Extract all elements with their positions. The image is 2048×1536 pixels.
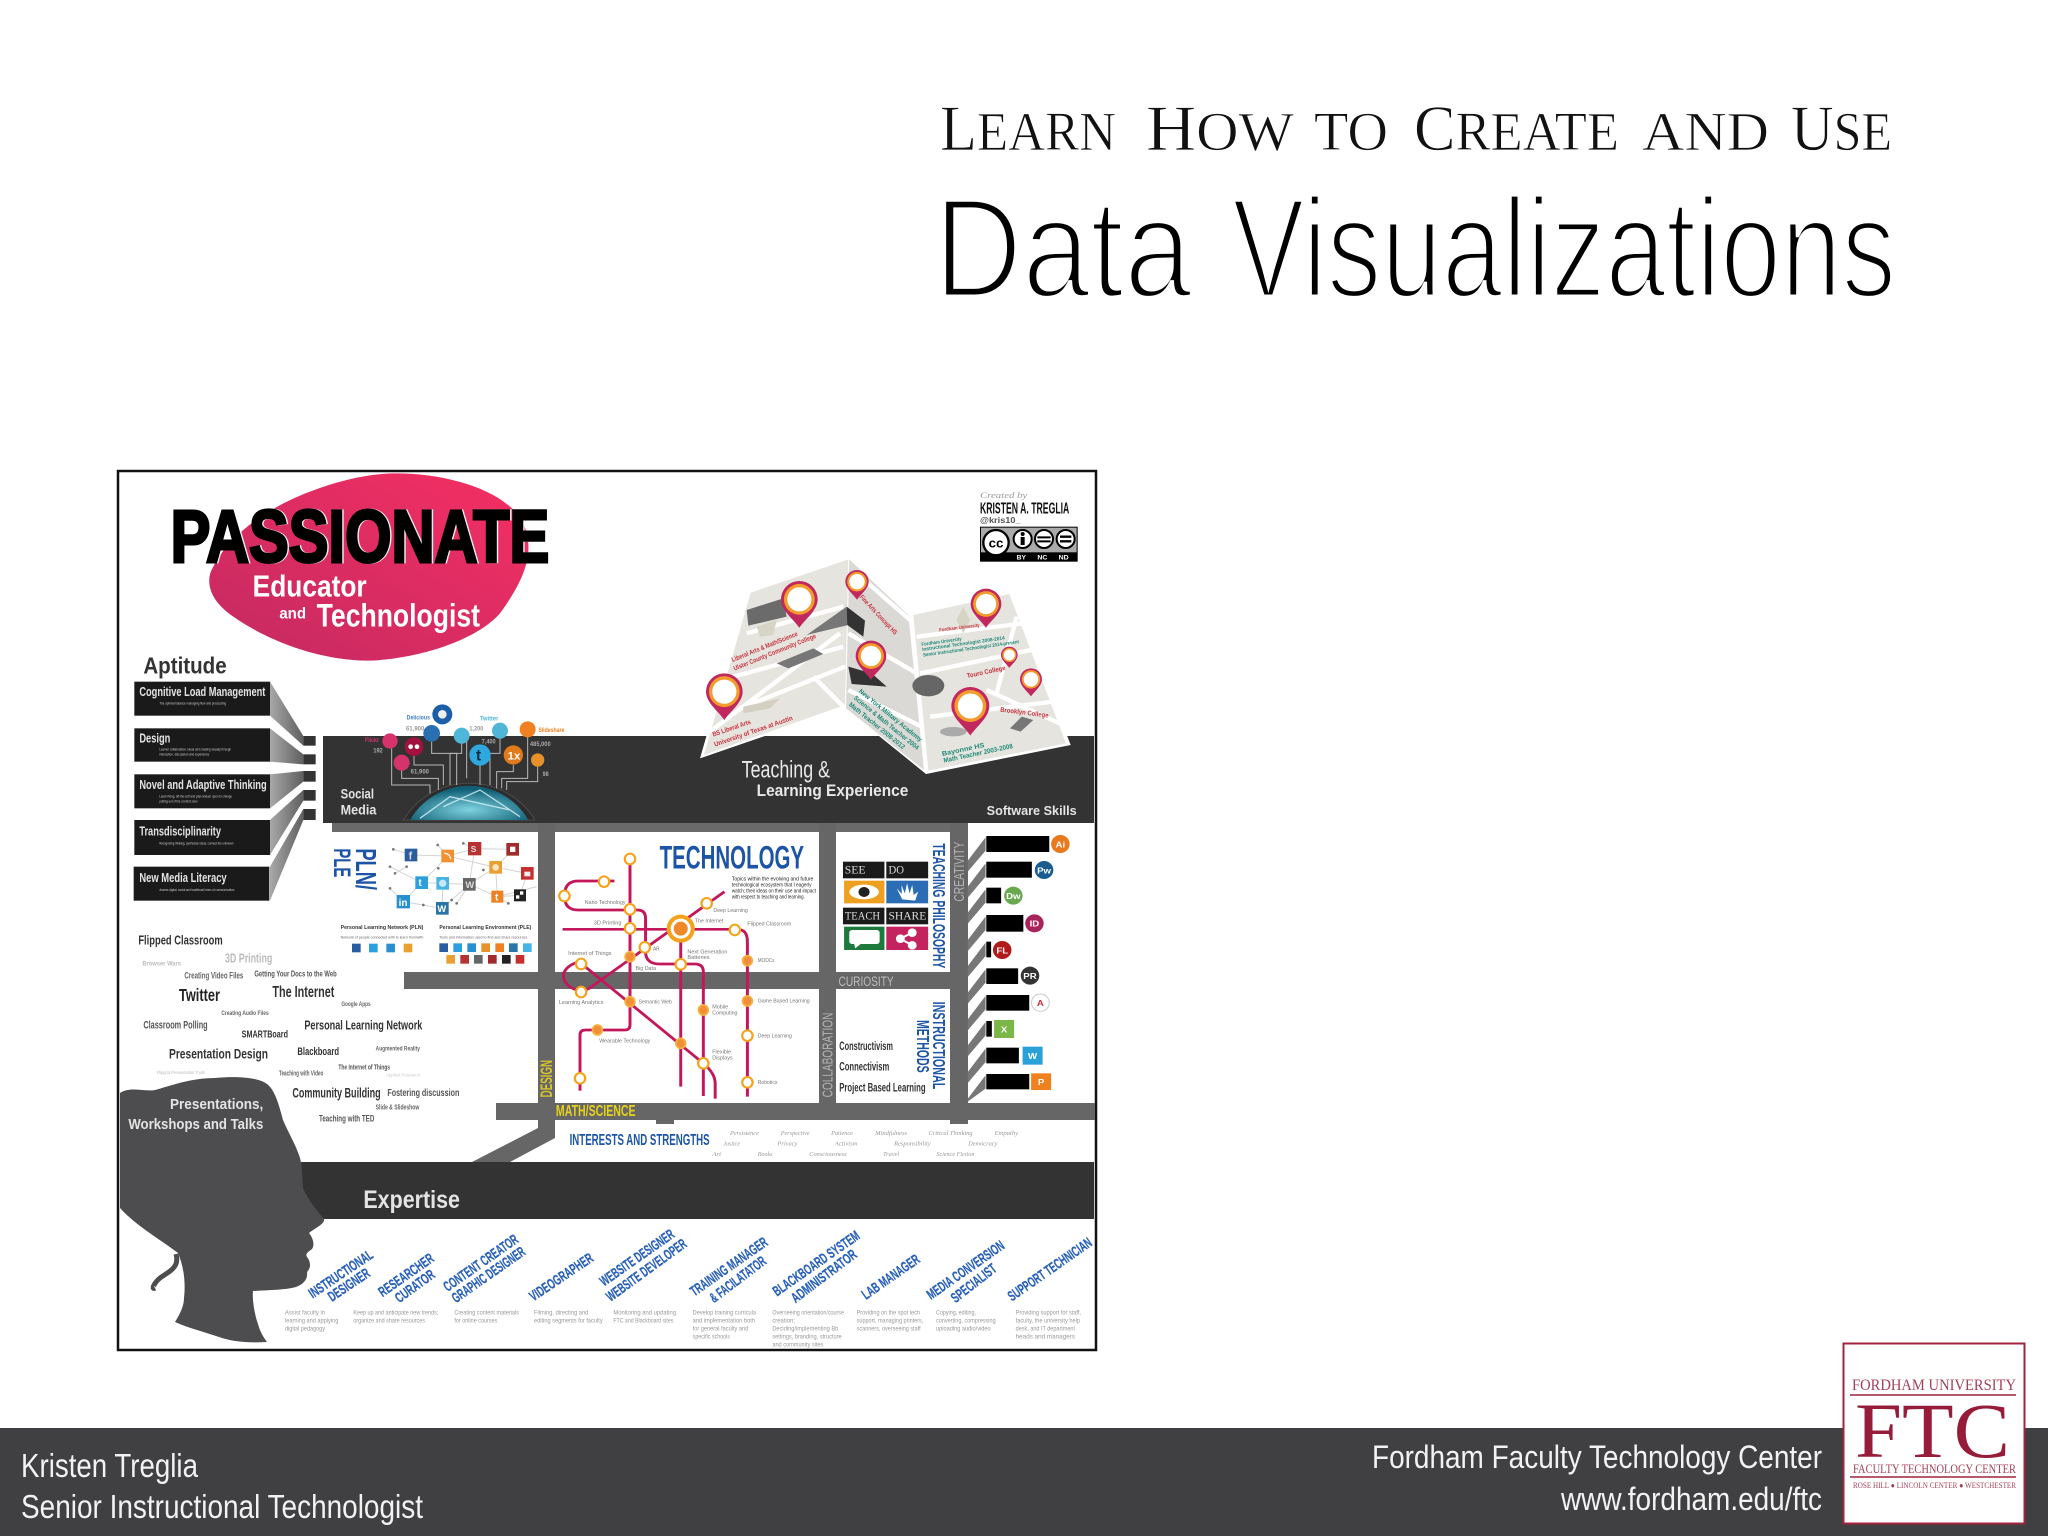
role descriptions, left: Filming, directing and [534, 1309, 589, 1316]
word cloud: Applied Research [386, 1073, 420, 1078]
data lines [392, 737, 538, 793]
bar connectors [968, 837, 986, 1102]
credit: created by [980, 491, 1069, 525]
road labels: MATH/SCIENCE [556, 1103, 636, 1120]
footer: organization [1372, 1439, 1822, 1517]
role descriptions, right: desk, and IT department [1016, 1326, 1075, 1333]
logo: FTC [1844, 1344, 2024, 1524]
subheading: educator and technologist [253, 570, 480, 634]
interests words: Empathy [993, 1130, 1018, 1137]
methods list: Project Based Learning [839, 1081, 926, 1095]
expertise roles, right [597, 1227, 1095, 1349]
map labels: Math Teacher 2008-2012 [847, 701, 906, 751]
word cloud: 3D Printing [225, 951, 272, 965]
methods list [839, 1040, 926, 1095]
filled stations [593, 952, 752, 1048]
panel: technology metro map [559, 840, 816, 1099]
station labels: Big Data [636, 966, 656, 972]
word cloud: The Internet of Things [338, 1065, 390, 1072]
software icons: ID [1030, 919, 1040, 929]
social labels: 485,000 [530, 741, 551, 748]
panel: teaching philosophy [843, 843, 949, 968]
heading: software skills: Software Skills [987, 803, 1077, 818]
methods list: Connectivism [839, 1060, 889, 1074]
interests words: Consciousness [809, 1151, 847, 1158]
social labels: 1,200 [469, 725, 484, 732]
role descriptions, right: FTC and Blackboard sites [613, 1318, 673, 1325]
heading: instructional methods: INSTRUCTIONAL [929, 1002, 949, 1089]
word cloud: Presentation Design [169, 1045, 268, 1061]
heading: PLN/PLE [328, 848, 381, 890]
interests words: Patience [830, 1130, 853, 1137]
word cloud: Augmented Reality [376, 1046, 420, 1053]
expertise roles, right: SPECIALIST [948, 1261, 1000, 1306]
heading: interests and strengths: INTERESTS AND STRENGTHS [570, 1131, 710, 1149]
network icons: t [418, 878, 422, 889]
aptitude box: transdisciplinarity: Transdisciplinarity [139, 824, 221, 838]
station labels: Game Based Learning [758, 999, 810, 1005]
word cloud: Slide & Slideshow [376, 1104, 420, 1111]
panel: embedded infographic [118, 471, 1096, 1350]
role descriptions, right: scanners, overseeing staff [857, 1326, 921, 1333]
logo: FTC: FORDHAM UNIVERSITY [1852, 1377, 2016, 1394]
network icons: W [465, 880, 474, 890]
role descriptions, left: learning and applying [285, 1318, 339, 1325]
social labels: Twitter [480, 716, 499, 723]
social icons: 1x [508, 750, 521, 762]
interests words: Persistence [729, 1130, 759, 1137]
title: data visualizations: Data [934, 169, 1192, 328]
credit: created by: @kris10_ [980, 515, 1021, 525]
metro hub [667, 915, 695, 943]
map labels: Ulster County Community College [733, 633, 818, 673]
word cloud: Personal Learning Network [304, 1017, 423, 1032]
social labels: 98 [543, 771, 549, 778]
heading: PLN/PLE: PLN/ [349, 848, 381, 890]
software icons: W [1028, 1051, 1038, 1061]
interests words: Privacy [776, 1141, 797, 1148]
role descriptions, right: creation; [772, 1318, 795, 1325]
tile: see: SEE [845, 863, 866, 876]
title: learn how to create and use: to [1314, 80, 1388, 167]
road network [404, 823, 1095, 1162]
role descriptions, right: for general faculty and [693, 1326, 749, 1333]
role descriptions, right: Providing on the spot tech [857, 1309, 920, 1316]
network icons: in [399, 898, 408, 909]
panel: software skills bars [968, 835, 1070, 1102]
role descriptions, left: digital pedagogy [285, 1326, 326, 1333]
logo: FTC: FTC [1855, 1387, 2010, 1474]
folded map [700, 556, 1071, 774]
station labels: Deep Learning [758, 1034, 792, 1039]
aptitude box: novel and adaptive thinking: Novel and Adaptive Thinking [139, 778, 267, 792]
social labels: Slideshare [538, 727, 565, 734]
word cloud: Flipped Classroom [138, 933, 223, 947]
metro lines [563, 858, 747, 1099]
map labels: Science & Math Teacher 2004 [852, 695, 920, 752]
aptitude box: cognitive load management: Cognitive Load Management [139, 685, 266, 699]
map labels [712, 594, 1049, 765]
title: learn how to create and use: Learn [940, 80, 1116, 167]
station labels: Robotics [758, 1080, 778, 1086]
ring stations [559, 854, 753, 1088]
network icons: t [495, 893, 499, 904]
social labels: 61,900 [406, 726, 425, 733]
word cloud: Creating Video Files [184, 971, 243, 981]
aptitude box: new media literacy: Assess digital, social and traditional forms of communication [159, 888, 234, 892]
heading: technology: TECHNOLOGY [660, 840, 804, 876]
word cloud: Twitter [179, 985, 220, 1005]
technology intro text [732, 877, 816, 901]
subheading: educator and technologist: Technologist [317, 598, 480, 634]
expertise roles, right: TRAINING MANAGER [687, 1234, 771, 1300]
map labels: Bayonne HS [941, 742, 986, 758]
captions: PLN and PLE: Personal Learning Environment (PLE) [439, 925, 531, 931]
network icons: S [471, 844, 477, 854]
map labels: Fordham University [921, 636, 962, 648]
role descriptions, right: converting, compressing [936, 1318, 996, 1325]
technology intro text: Topics within the evolving and future [732, 877, 813, 883]
map labels: Fordham University [939, 623, 980, 634]
station labels: 3D Printing [594, 921, 622, 926]
word cloud: Classroom Polling [143, 1019, 208, 1031]
map labels: Instructional Technologist 2008-2014 [922, 635, 1005, 653]
aptitude box: novel and adaptive thinking: Learn fixing, off-the-cuff and plan ahead; open to change [159, 795, 232, 799]
panel: PLN and PLE network [328, 842, 537, 964]
role descriptions, right: faculty, the university help [1016, 1318, 1080, 1325]
software icons: Ai [1056, 840, 1065, 849]
expertise roles, left: CONTENT CREATOR [441, 1232, 522, 1295]
heading: expertise: Expertise [363, 1187, 460, 1214]
software icons: Pw [1037, 866, 1052, 875]
station labels: Mobile [712, 1005, 728, 1010]
interests words: Science Fiction [936, 1151, 975, 1158]
word cloud: Creating Audio Files [221, 1010, 269, 1017]
footer: organization: www.fordham.edu/ftc [1560, 1481, 1822, 1517]
interests words: Books [758, 1151, 773, 1158]
software icons: A [1037, 998, 1044, 1008]
station labels: Deep Learning [713, 908, 748, 914]
heading: PLN/PLE: PLE [328, 848, 355, 877]
network icons: W [437, 904, 446, 914]
software icons: PR [1023, 971, 1037, 981]
panel: aptitude [134, 652, 316, 901]
road labels: CURIOSITY [839, 975, 894, 990]
label: social media: Media [341, 802, 377, 818]
software icons: P [1038, 1077, 1044, 1087]
label: social media: Social [341, 786, 374, 802]
heading: aptitude: Aptitude [143, 652, 227, 678]
role descriptions, left: editing segments for faculty [534, 1318, 603, 1325]
expertise roles, left: DESIGNER [325, 1265, 374, 1305]
technology intro text: with respect to teaching and learning. [732, 895, 805, 901]
connectors [270, 682, 303, 901]
footer: presenter: Senior Instructional Technologist [21, 1488, 423, 1525]
map labels: Touro College [966, 665, 1006, 680]
station labels: AR [653, 947, 660, 953]
icon: creative commons badge: NC [1037, 554, 1048, 561]
panel: instructional methods [839, 1002, 949, 1095]
title: learn how to create and use: Create [1414, 80, 1619, 167]
panel: social media [341, 704, 565, 820]
heading: passionate: PASSIONATE [171, 495, 549, 578]
station labels: Learning Analytics [559, 1000, 604, 1006]
head silhouette [120, 1077, 324, 1342]
role descriptions, right [613, 1309, 1081, 1349]
globe [403, 783, 535, 820]
word cloud: Browser Wars [142, 960, 181, 967]
word cloud: Blackboard [297, 1046, 339, 1058]
expertise roles, right: WEBSITE DEVELOPER [604, 1236, 690, 1305]
role descriptions, left [285, 1309, 603, 1333]
technology intro text: technological ecosystem that I eagerly [732, 883, 812, 889]
road labels: DESIGN [539, 1060, 556, 1097]
map labels: BS Liberal Arts [712, 719, 752, 739]
interests words [711, 1130, 1018, 1158]
heading: presentations, workshops and talks: Workshops and Talks [128, 1117, 263, 1133]
title: data visualizations [934, 169, 1896, 328]
social icons [382, 704, 544, 771]
title: learn how to create and use [940, 80, 1892, 167]
role descriptions, right: Develop training curricula [693, 1309, 756, 1316]
station labels: Next Generation [687, 950, 727, 955]
panel: interests and strengths [570, 1130, 1018, 1158]
software icons: X [1001, 1025, 1008, 1034]
map labels: Brooklyn College [1000, 707, 1049, 720]
interests words: Democracy [967, 1141, 997, 1148]
expertise roles, left: RESEARCHER [376, 1251, 438, 1301]
heading: teaching philosophy: TEACHING PHILOSOPHY [929, 843, 949, 968]
credit: created by: KRISTEN A. TREGLIA [980, 501, 1069, 518]
title: learn how to create and use: How [1146, 80, 1294, 167]
network nodes [389, 842, 510, 906]
word cloud: The Internet [272, 984, 335, 1001]
captions: PLN and PLE: Network of people connected with to learn from/with [341, 934, 423, 939]
footer bar [0, 1428, 2048, 1536]
role descriptions, right: heads and managers [1016, 1334, 1075, 1341]
word cloud [138, 933, 459, 1124]
expertise roles, left: INSTRUCTIONAL [306, 1247, 377, 1302]
aptitude box: novel and adaptive thinking [134, 774, 270, 808]
aptitude box: design: Design [139, 732, 170, 746]
station labels: Nano Technology [585, 900, 626, 906]
interests words: Art [711, 1151, 721, 1158]
station labels: Batteries [687, 955, 710, 961]
interests words: Justice [723, 1141, 740, 1148]
station labels: Computing [712, 1011, 737, 1016]
word cloud: Google Apps [341, 1001, 371, 1008]
station labels: Wearable Technology [599, 1039, 651, 1044]
icon: creative commons badge [980, 527, 1078, 562]
map labels: Senior Instructional Technologist 2014-present [923, 639, 1020, 659]
station labels: Displays [712, 1056, 733, 1061]
aptitude box: design: Learner collaboration, ideas and creating visually through [159, 748, 231, 752]
word cloud: SMARTBoard [242, 1029, 288, 1040]
tile: teach: TEACH [845, 909, 880, 922]
technology intro text: watch; their ideas on their use and impact [732, 889, 816, 895]
role descriptions, right: and implementation both [693, 1318, 755, 1325]
label: social media [341, 786, 377, 818]
interests words: Mindfulness [874, 1130, 907, 1137]
map labels: Math Teacher 2003-2008 [943, 743, 1014, 765]
tile: share: SHARE [889, 909, 926, 922]
icon: creative commons badge: BY [1017, 554, 1027, 561]
expertise roles, left: GRAPHIC DESIGNER [449, 1244, 529, 1307]
title: learn how to create and use: and [1642, 80, 1769, 167]
captions: PLN and PLE [341, 925, 531, 939]
social icons: t [476, 748, 481, 765]
expertise roles, left: VIDEOGRAPHER [527, 1250, 597, 1305]
role descriptions, right: specific schools [693, 1334, 730, 1341]
role descriptions, left: Assist faculty in [285, 1309, 325, 1316]
heading: instructional methods [913, 1002, 949, 1089]
expertise roles, right: MEDIA CONVERSION [924, 1238, 1008, 1303]
logo: FTC: ROSE HILL ● LINCOLN CENTER ● WESTCHESTER [1853, 1481, 2017, 1490]
role descriptions, right: Overseeing orientation/course [772, 1309, 844, 1316]
road labels: COLLABORATION [819, 1013, 836, 1097]
station labels: Internet of Things [568, 951, 612, 957]
methods list: Constructivism [839, 1040, 893, 1053]
station labels: Flipped Classroom [747, 922, 792, 928]
role descriptions, left: Keep up and anticipate new trends; [353, 1309, 439, 1316]
map labels: University of Texas at Austin [713, 715, 794, 749]
heading: presentations, workshops and talks: Presentations, [170, 1097, 263, 1113]
social labels: 7,400 [482, 738, 496, 745]
heading: teaching and learning experience: Learning Experience [757, 781, 908, 800]
software icons: FL [996, 946, 1009, 955]
station labels [559, 900, 810, 1086]
heading: teaching and learning experience: Teaching & [742, 756, 830, 783]
dark band: social media and teaching [323, 736, 1094, 832]
aptitude box: transdisciplinarity [134, 820, 270, 855]
icon: creative commons badge: ND [1059, 554, 1069, 561]
role descriptions, left: Creating content materials [454, 1309, 519, 1316]
interests words: Activism [834, 1141, 858, 1148]
heading: presentations, workshops and talks [128, 1097, 263, 1133]
expertise roles, left: CURATOR [392, 1267, 439, 1307]
aptitude box: novel and adaptive thinking: putting out of the comfort zone [159, 800, 198, 804]
role descriptions, left: for online courses [454, 1318, 497, 1325]
footer: presenter [21, 1447, 423, 1525]
aptitude box: cognitive load management [134, 682, 270, 716]
aptitude box: design [134, 728, 270, 762]
word cloud: Flipgrid Presentation Tools [157, 1070, 206, 1075]
headline blob and title [171, 473, 549, 661]
expertise roles, left [285, 1232, 603, 1333]
role descriptions, right: Providing support for staff, [1016, 1309, 1081, 1316]
social labels [365, 714, 565, 778]
tile: do: DO [889, 863, 904, 876]
panel: map of teaching and learning experience [700, 491, 1078, 818]
road labels: CREATIVITY [950, 841, 967, 902]
station labels: MOOCs [758, 958, 775, 964]
network graph [390, 843, 537, 908]
heading: instructional methods: METHODS [913, 1020, 933, 1073]
station labels: Flexible [712, 1050, 731, 1055]
credit: created by: Created by [980, 491, 1028, 500]
footer: organization: Fordham Faculty Technology Center [1372, 1439, 1822, 1475]
station labels: Semantic Web [639, 1000, 672, 1005]
network icons [397, 842, 534, 915]
interests words: Travel [883, 1151, 899, 1158]
role descriptions, right: support, managing printers, [857, 1318, 924, 1325]
word cloud: Teaching with TED [319, 1114, 375, 1124]
expertise roles, right: LAB MANAGER [859, 1252, 924, 1303]
road labels [539, 841, 967, 1120]
aptitude box: new media literacy: New Media Literacy [139, 871, 227, 885]
aptitude box: design: interaction, discussion and experience [159, 753, 209, 757]
aptitude box: transdisciplinarity: Recognizing thinking, synthesize ideas, connect the unknown [159, 842, 233, 846]
expertise roles, right: & FACILATATOR [707, 1253, 770, 1307]
subheading: educator and technologist: and [279, 606, 306, 623]
network icons: f [409, 850, 413, 862]
role descriptions, right: uploading audio/video [936, 1326, 991, 1333]
role descriptions, right: Monitoring and updating [613, 1309, 676, 1316]
expertise roles, right: WEBSITE DESIGNER [597, 1227, 678, 1290]
software icons [993, 835, 1070, 1090]
map labels: Fine Arts Concept HS [858, 594, 899, 637]
software icons: Dw [1006, 891, 1021, 901]
interests words: Responsibility [893, 1141, 931, 1148]
social labels: Flickr [365, 737, 379, 744]
subheading: educator and technologist: Educator [253, 570, 367, 604]
social labels: 61,900 [411, 769, 429, 776]
map labels: Liberal Arts & Math/Science [731, 631, 799, 664]
word cloud: Fostering discussion [387, 1088, 459, 1099]
heading: teaching and learning experience [742, 756, 908, 800]
aptitude box: cognitive load management: The optimal balance managing flow and processing [159, 701, 226, 705]
title: learn how to create and use: Use [1791, 80, 1892, 167]
station labels: The Internet [695, 919, 724, 924]
captions: PLN and PLE: Tools and information used to find and share resources [439, 934, 527, 939]
icon: creative commons badge: cc [989, 535, 1004, 550]
interests words: Perspective [780, 1130, 810, 1137]
role descriptions, right: Copying, editing, [936, 1309, 976, 1316]
expertise roles, right: SUPPORT TECHNICIAN [1005, 1235, 1095, 1305]
captions: PLN and PLE: Personal Learning Network (PLN) [341, 925, 423, 931]
expertise roles, right: ADMINISTRATOR [788, 1247, 861, 1307]
role descriptions, right: and community sites [772, 1342, 823, 1349]
role descriptions, right: Deciding/implementing Bb [772, 1326, 839, 1333]
footer: presenter: Kristen Treglia [21, 1447, 199, 1484]
expertise roles, right: BLACKBOARD SYSTEM [770, 1228, 863, 1300]
map labels: New York Military Academy [857, 688, 923, 744]
expertise bar [300, 1162, 1094, 1219]
social labels: 192 [373, 748, 383, 755]
map pins [706, 570, 1042, 735]
word cloud: Community Building [292, 1085, 381, 1101]
social labels: Delicious [407, 714, 430, 721]
aptitude box: new media literacy [134, 867, 269, 901]
role descriptions, right: settings, branding, structure [772, 1334, 842, 1341]
small icon rows [352, 943, 532, 964]
word cloud: Teaching with Video [279, 1071, 323, 1078]
skill bars [986, 836, 1049, 1089]
role descriptions, left: organize and share resources [353, 1318, 425, 1325]
interests words: Critical Thinking [929, 1130, 973, 1137]
word cloud: Getting Your Docs to the Web [254, 969, 337, 979]
